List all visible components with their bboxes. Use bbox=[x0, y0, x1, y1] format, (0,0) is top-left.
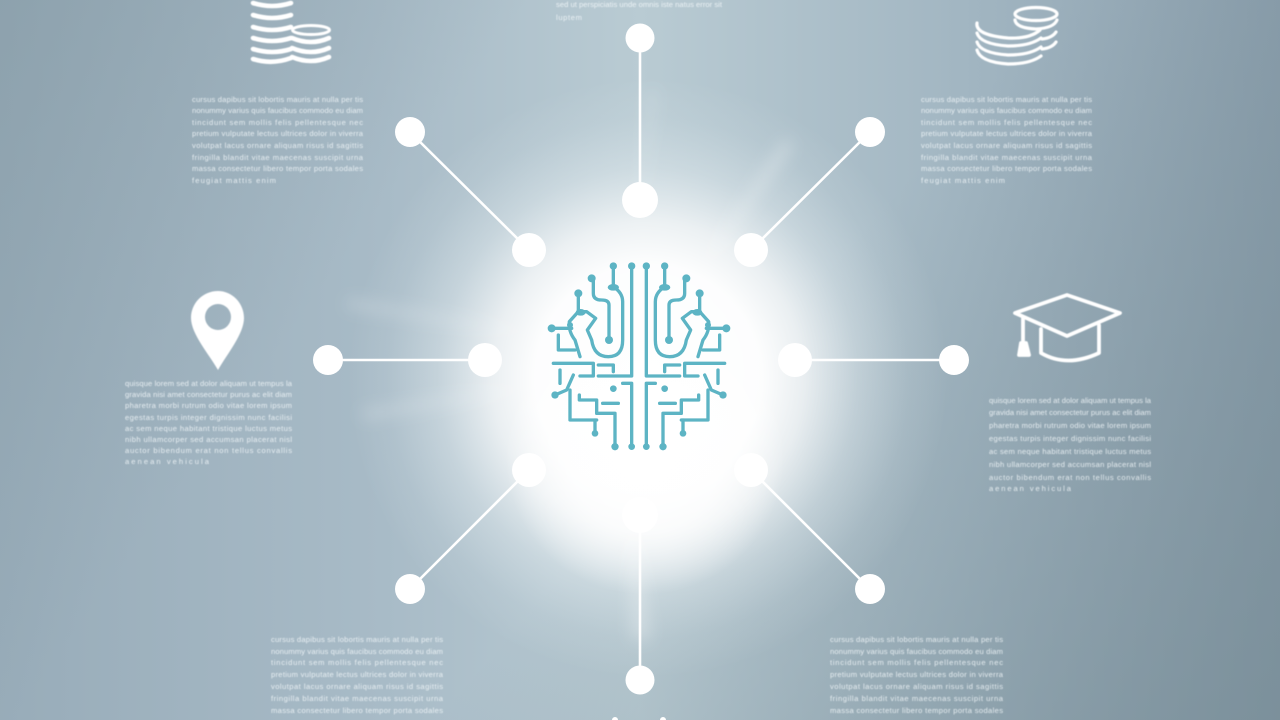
text block: right: gravida nisi amet consectetur purus ac elit diam bbox=[989, 408, 1151, 417]
text block: bottom left: tincidunt sem mollis felis pellentesque nec bbox=[271, 658, 443, 667]
text block: right: egestas turpis integer dignissim nunc facilisi bbox=[989, 434, 1151, 443]
text block: top left: pretium vulputate lectus ultrices dolor in viverra bbox=[192, 129, 364, 138]
icon: circuit brain bbox=[548, 262, 730, 450]
text block: left bbox=[125, 379, 293, 466]
text block: top centre bbox=[556, 0, 723, 22]
text block: bottom right: massa consectetur libero tempor porta sodales bbox=[830, 706, 1003, 715]
text block: top left: nonummy varius quis faucibus commodo eu diam bbox=[192, 106, 363, 115]
text block: bottom left: volutpat lacus ornare aliquam risus id sagittis bbox=[271, 682, 443, 691]
text block: top right: nonummy varius quis faucibus commodo eu diam bbox=[921, 106, 1092, 115]
spoke: bottom left bbox=[395, 453, 546, 604]
clipped icon tips at bottom edge bbox=[612, 717, 666, 720]
text block: right: aenean vehicula bbox=[989, 484, 1072, 493]
text block: top right: cursus dapibus sit lobortis mauris at nulla per tis bbox=[921, 95, 1092, 104]
text block: right: pharetra morbi rutrum odio vitae lorem ipsum bbox=[989, 421, 1151, 430]
text block: left: auctor bibendum erat non tellus convallis bbox=[125, 446, 292, 455]
text block: top right: massa consectetur libero tempor porta sodales bbox=[921, 164, 1092, 173]
text block: right: auctor bibendum erat non tellus convallis bbox=[989, 473, 1151, 482]
text block: left: ac sem neque habitant tristique luctus metus bbox=[125, 424, 292, 433]
text block: bottom right: fringilla blandit vitae maecenas suscipit urna bbox=[830, 694, 1004, 703]
spoke: left bbox=[313, 343, 502, 377]
text block: top left bbox=[192, 95, 364, 185]
text block: top right: tincidunt sem mollis felis pellentesque nec bbox=[921, 118, 1092, 127]
text block: top centre: sed ut perspiciatis unde omnis iste natus error sit bbox=[556, 0, 723, 9]
text block: top left: fringilla blandit vitae maecenas suscipit urna bbox=[192, 153, 364, 162]
text block: right: ac sem neque habitant tristique luctus metus bbox=[989, 447, 1151, 456]
text block: top right bbox=[921, 95, 1093, 185]
text block: top right: volutpat lacus ornare aliquam risus id sagittis bbox=[921, 141, 1092, 150]
text block: top left: massa consectetur libero tempor porta sodales bbox=[192, 164, 363, 173]
text block: left: aenean vehicula bbox=[125, 457, 210, 466]
text block: bottom right: tincidunt sem mollis felis pellentesque nec bbox=[830, 658, 1003, 667]
text block: bottom left bbox=[271, 635, 444, 715]
text block: left: gravida nisi amet consectetur purus ac elit diam bbox=[125, 390, 292, 399]
text block: top right: pretium vulputate lectus ultrices dolor in viverra bbox=[921, 129, 1093, 138]
text block: top centre: luptem bbox=[556, 13, 582, 22]
text block: top left: feugiat mattis enim bbox=[192, 176, 276, 185]
spoke: top right bbox=[734, 117, 885, 267]
icon: coin stacks top left bbox=[253, 3, 330, 62]
text block: top right: fringilla blandit vitae maecenas suscipit urna bbox=[921, 153, 1093, 162]
text block: right bbox=[989, 396, 1152, 493]
text block: bottom right: volutpat lacus ornare aliquam risus id sagittis bbox=[830, 682, 1003, 691]
text block: right: nibh ullamcorper sed accumsan placerat nisl bbox=[989, 460, 1151, 469]
text block: bottom left: pretium vulputate lectus ultrices dolor in viverra bbox=[271, 670, 444, 679]
text block: top left: cursus dapibus sit lobortis mauris at nulla per tis bbox=[192, 95, 363, 104]
spoke: bottom right bbox=[734, 453, 885, 604]
text block: top right: feugiat mattis enim bbox=[921, 176, 1005, 185]
text block: bottom left: nonummy varius quis faucibus commodo eu diam bbox=[271, 647, 443, 656]
text block: top left: volutpat lacus ornare aliquam risus id sagittis bbox=[192, 141, 363, 150]
spoke: bottom bbox=[622, 497, 658, 694]
icon: coin stacks top right bbox=[977, 8, 1057, 64]
text block: bottom right: nonummy varius quis faucibus commodo eu diam bbox=[830, 647, 1003, 656]
text block: bottom left: cursus dapibus sit lobortis mauris at nulla per tis bbox=[271, 635, 443, 644]
text block: left: nibh ullamcorper sed accumsan placerat nisl bbox=[125, 435, 292, 444]
spoke: top bbox=[622, 24, 658, 218]
text block: top left: tincidunt sem mollis felis pellentesque nec bbox=[192, 118, 363, 127]
icon: graduation cap bbox=[1015, 295, 1120, 360]
spoke: top left bbox=[395, 117, 546, 267]
text block: bottom left: fringilla blandit vitae maecenas suscipit urna bbox=[271, 694, 444, 703]
text block: left: quisque lorem sed at dolor aliquam ut tempus la bbox=[125, 379, 293, 388]
text block: right: quisque lorem sed at dolor aliquam ut tempus la bbox=[989, 396, 1152, 405]
spoke: right bbox=[778, 343, 969, 377]
brain right half bbox=[643, 262, 730, 450]
text block: left: egestas turpis integer dignissim nunc facilisi bbox=[125, 413, 292, 422]
text block: bottom right bbox=[830, 635, 1004, 715]
icon: map pin bbox=[191, 291, 244, 370]
text block: bottom left: massa consectetur libero tempor porta sodales bbox=[271, 706, 443, 715]
text block: bottom right: cursus dapibus sit lobortis mauris at nulla per tis bbox=[830, 635, 1003, 644]
brain left half bbox=[548, 262, 635, 450]
text block: left: pharetra morbi rutrum odio vitae lorem ipsum bbox=[125, 401, 292, 410]
text block: bottom right: pretium vulputate lectus ultrices dolor in viverra bbox=[830, 670, 1004, 679]
